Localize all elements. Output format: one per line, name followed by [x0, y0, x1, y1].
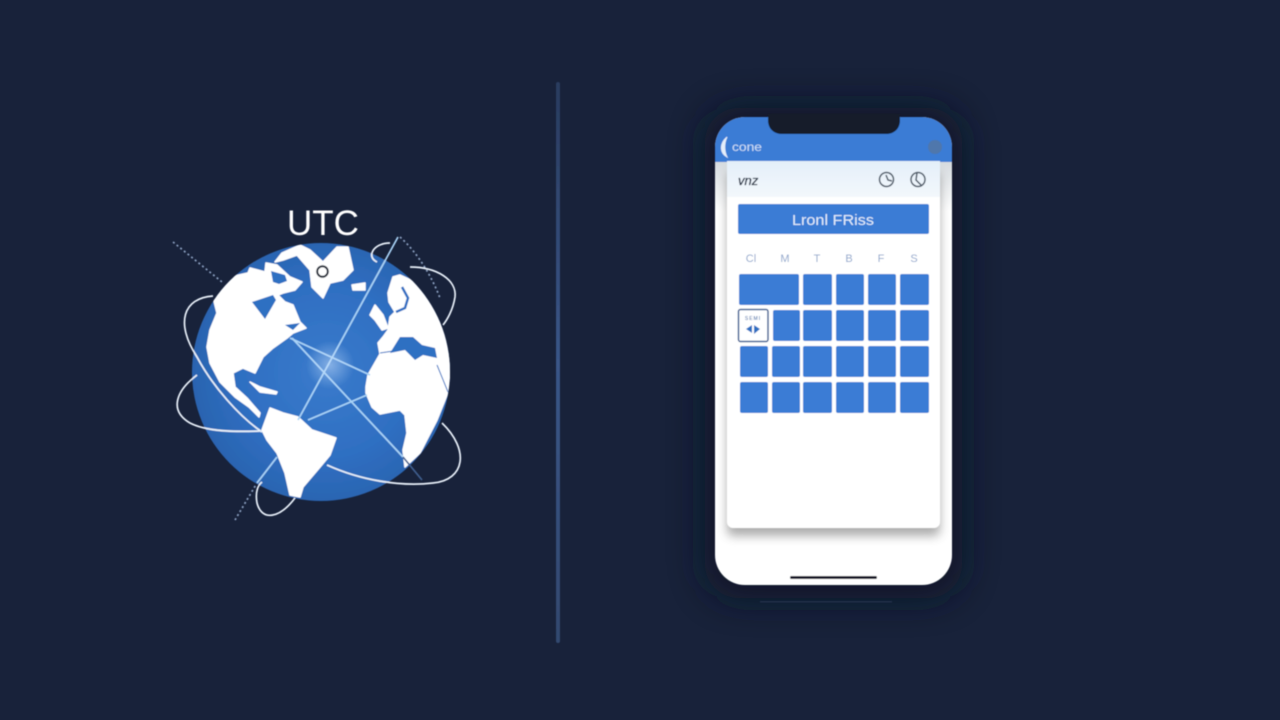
North America: [207, 263, 306, 417]
Baffin channel: [271, 271, 287, 284]
Strait of Gibraltar: [380, 350, 400, 353]
connection lines: [257, 237, 403, 483]
United Kingdom: [370, 305, 388, 330]
top app bar: [715, 117, 952, 162]
shadow line under phone: [760, 601, 892, 602]
calendar grid: [739, 274, 929, 413]
Iceland: [352, 283, 365, 290]
phone shadow: [705, 108, 962, 598]
phone inner shading: [715, 117, 952, 536]
smartphone: [715, 114, 952, 585]
phone body: [715, 117, 952, 585]
Great Lakes: [285, 323, 300, 330]
Red Sea: [437, 365, 448, 392]
continents: [207, 245, 451, 497]
moon icon: [721, 137, 727, 157]
weekday labels: [746, 253, 918, 265]
Mediterranean Sea: [390, 337, 437, 360]
Eurasia and Africa: [366, 275, 451, 467]
clock icon right: [911, 172, 925, 186]
orbit rings: [177, 243, 460, 515]
Baltic Sea: [396, 287, 408, 312]
ocean sphere: [192, 243, 450, 501]
inland seas and bays: [252, 271, 437, 360]
UTC label: UTC: [287, 204, 359, 243]
Cuba: [250, 382, 277, 394]
dotted guide lines: [173, 237, 440, 520]
selected date cell: [738, 310, 768, 342]
notch: [768, 114, 900, 134]
calendar card: [727, 161, 940, 528]
app title: cone: [732, 140, 762, 154]
globe illustration with orbits: [173, 204, 460, 520]
vertical divider: [556, 82, 560, 643]
weekday labels: M: [780, 253, 790, 265]
weekday labels: B: [845, 253, 853, 265]
Hudson Bay: [252, 295, 276, 319]
month banner: [738, 204, 929, 234]
weekday labels: F: [878, 253, 885, 265]
Greenland: [275, 245, 353, 298]
month banner: Lronl FRiss: [792, 212, 874, 229]
card header: [727, 161, 940, 197]
card shadow: [727, 172, 940, 536]
location marker: [317, 266, 328, 277]
selected date cell: SEMI: [745, 316, 761, 322]
weekday labels: Cl: [746, 253, 756, 265]
header label: vnz: [738, 173, 759, 188]
central glow: [306, 341, 354, 389]
weekday labels: S: [910, 253, 918, 265]
weekday labels: T: [814, 253, 821, 265]
home indicator: [790, 576, 877, 579]
clock icon left: [880, 172, 894, 186]
South America: [262, 408, 336, 497]
profile icon: [928, 140, 942, 154]
